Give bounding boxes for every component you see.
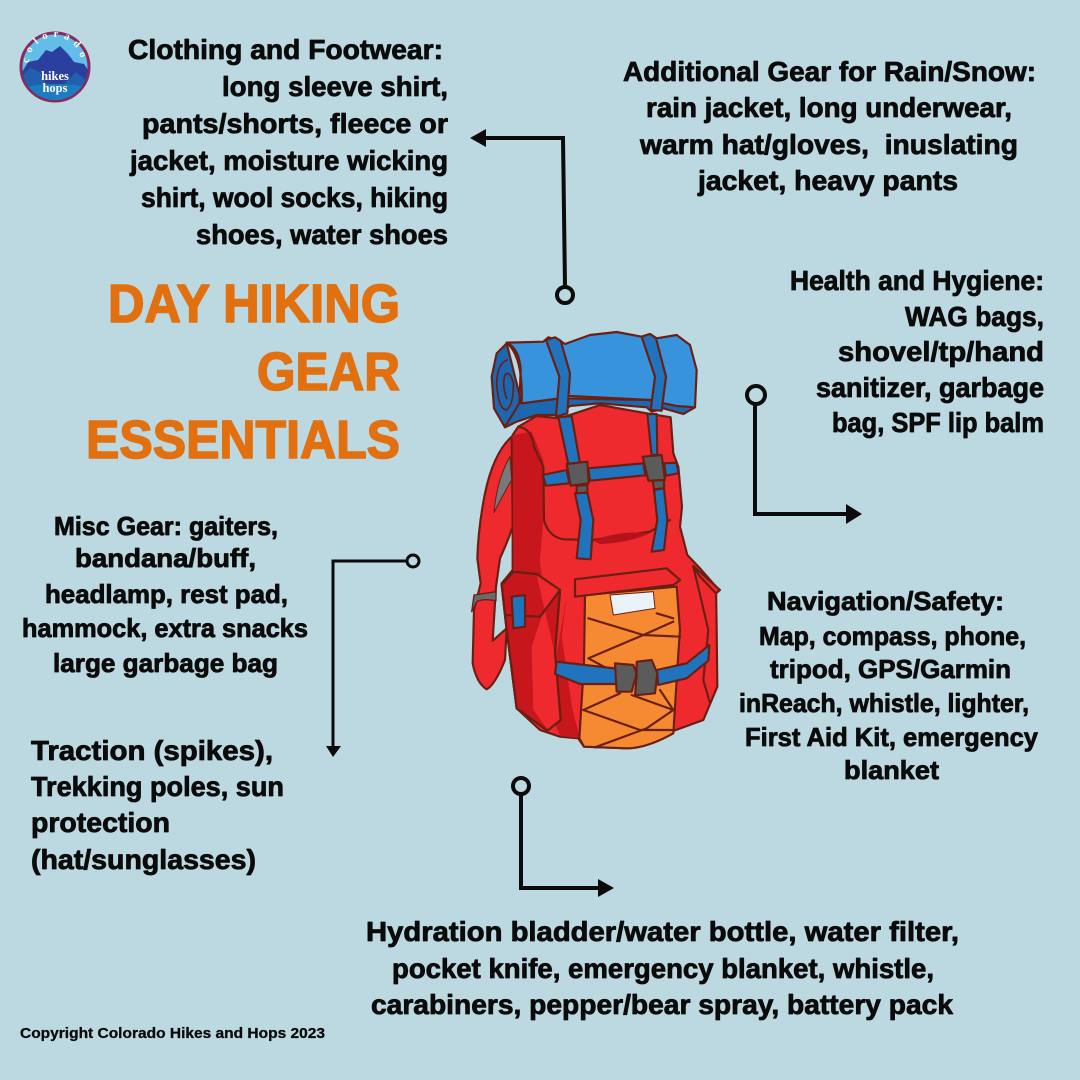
text block: clothing and footwear: shirt, wool socks, hiking	[141, 182, 448, 213]
white tag	[610, 592, 655, 615]
darker left side	[513, 432, 543, 577]
logo: Colorado Hikes and Hops badge: hikes	[41, 69, 69, 83]
arrow: to traction and poles	[326, 555, 419, 757]
text block: additional gear for rain and snow	[623, 56, 1036, 196]
text block: hydration and tools: carabiners, pepper/bear spray, battery pack	[371, 989, 954, 1020]
text block: navigation and safety: inReach, whistle, lighter,	[739, 688, 1029, 718]
text block: misc gear: headlamp, rest pad,	[45, 579, 288, 609]
text block: hydration and tools: Hydration bladder/water bottle, water filter,	[366, 916, 959, 947]
text block: clothing and footwear: pants/shorts, fleece or	[142, 108, 448, 139]
title	[86, 274, 400, 470]
title: DAY HIKING	[108, 274, 400, 334]
text block: health and hygiene: sanitizer, garbage	[816, 372, 1044, 403]
text block: health and hygiene: WAG bags,	[905, 301, 1044, 332]
text block: clothing and footwear: Clothing and Footwear:	[128, 34, 443, 65]
lower straps	[575, 493, 593, 559]
text block: additional gear for rain and snow: jacket, heavy pants	[697, 165, 958, 196]
text block: traction and poles: protection	[31, 807, 170, 838]
text block: clothing and footwear: long sleeve shirt,	[222, 71, 448, 102]
text block: traction and poles	[31, 735, 284, 875]
text block: traction and poles: Trekking poles, sun	[31, 771, 284, 802]
text block: navigation and safety: blanket	[844, 755, 939, 785]
shoulder strap	[473, 437, 513, 689]
lacing	[588, 618, 680, 637]
text block: additional gear for rain and snow: rain jacket, long underwear,	[646, 92, 1012, 123]
text block: clothing and footwear: shoes, water shoes	[196, 219, 448, 250]
text block: misc gear: Misc Gear: gaiters,	[54, 511, 278, 541]
text block: misc gear	[22, 511, 308, 678]
title: GEAR	[257, 342, 400, 402]
text block: navigation and safety: First Aid Kit, emergency	[745, 722, 1039, 752]
main body	[502, 405, 717, 748]
bedroll end spiral	[505, 343, 521, 427]
text block: traction and poles: (hat/sunglasses)	[31, 844, 256, 875]
text block: health and hygiene: shovel/tp/hand	[838, 336, 1044, 367]
bedroll	[492, 343, 695, 427]
bedroll straps	[546, 337, 570, 417]
icon: red backpack	[472, 332, 720, 748]
side pocket left	[502, 572, 561, 731]
buckles	[567, 462, 589, 486]
top flap	[518, 427, 670, 540]
logo: Colorado Hikes and Hops badge: hops	[42, 81, 68, 95]
upper straps	[558, 416, 580, 464]
arrow: to clothing and footwear	[470, 129, 573, 303]
title: ESSENTIALS	[86, 410, 400, 470]
text block: traction and poles: Traction (spikes),	[31, 735, 273, 766]
text block: hydration and tools: pocket knife, emergency blanket, whistle,	[392, 953, 934, 984]
text block: navigation and safety	[739, 586, 1039, 785]
logo: Colorado Hikes and Hops badge	[20, 32, 90, 102]
text block: health and hygiene	[790, 265, 1044, 438]
orange mesh panel	[579, 587, 680, 748]
text block: navigation and safety: tripod, GPS/Garmin	[770, 654, 1011, 684]
text block: clothing and footwear: jacket, moisture wicking	[129, 145, 448, 176]
text block: misc gear: hammock, extra snacks	[22, 613, 308, 643]
copyright: Copyright Colorado Hikes and Hops 2023	[20, 1026, 325, 1042]
text block: health and hygiene: Health and Hygiene:	[790, 265, 1044, 296]
text block: clothing and footwear	[128, 34, 448, 250]
side pocket right	[693, 567, 710, 703]
text block: misc gear: bandana/buff,	[75, 543, 256, 573]
text block: navigation and safety: Navigation/Safety:	[767, 586, 1004, 616]
text block: hydration and tools	[366, 916, 959, 1020]
text block: additional gear for rain and snow: warm hat/gloves, inuslating	[639, 129, 1018, 160]
arrow: to hydration	[513, 778, 614, 897]
text block: misc gear: large garbage bag	[53, 648, 278, 678]
waist belt	[555, 662, 620, 684]
belt buckle	[615, 663, 637, 692]
logo: Colorado Hikes and Hops badge: colorado	[24, 32, 85, 63]
text block: health and hygiene: bag, SPF lip balm	[832, 407, 1044, 438]
text block: additional gear for rain and snow: Additional Gear for Rain/Snow:	[623, 56, 1036, 87]
pocket flap	[575, 568, 680, 597]
text block: navigation and safety: Map, compass, phone,	[759, 621, 1026, 651]
arrow: to health and hygiene	[747, 386, 862, 524]
